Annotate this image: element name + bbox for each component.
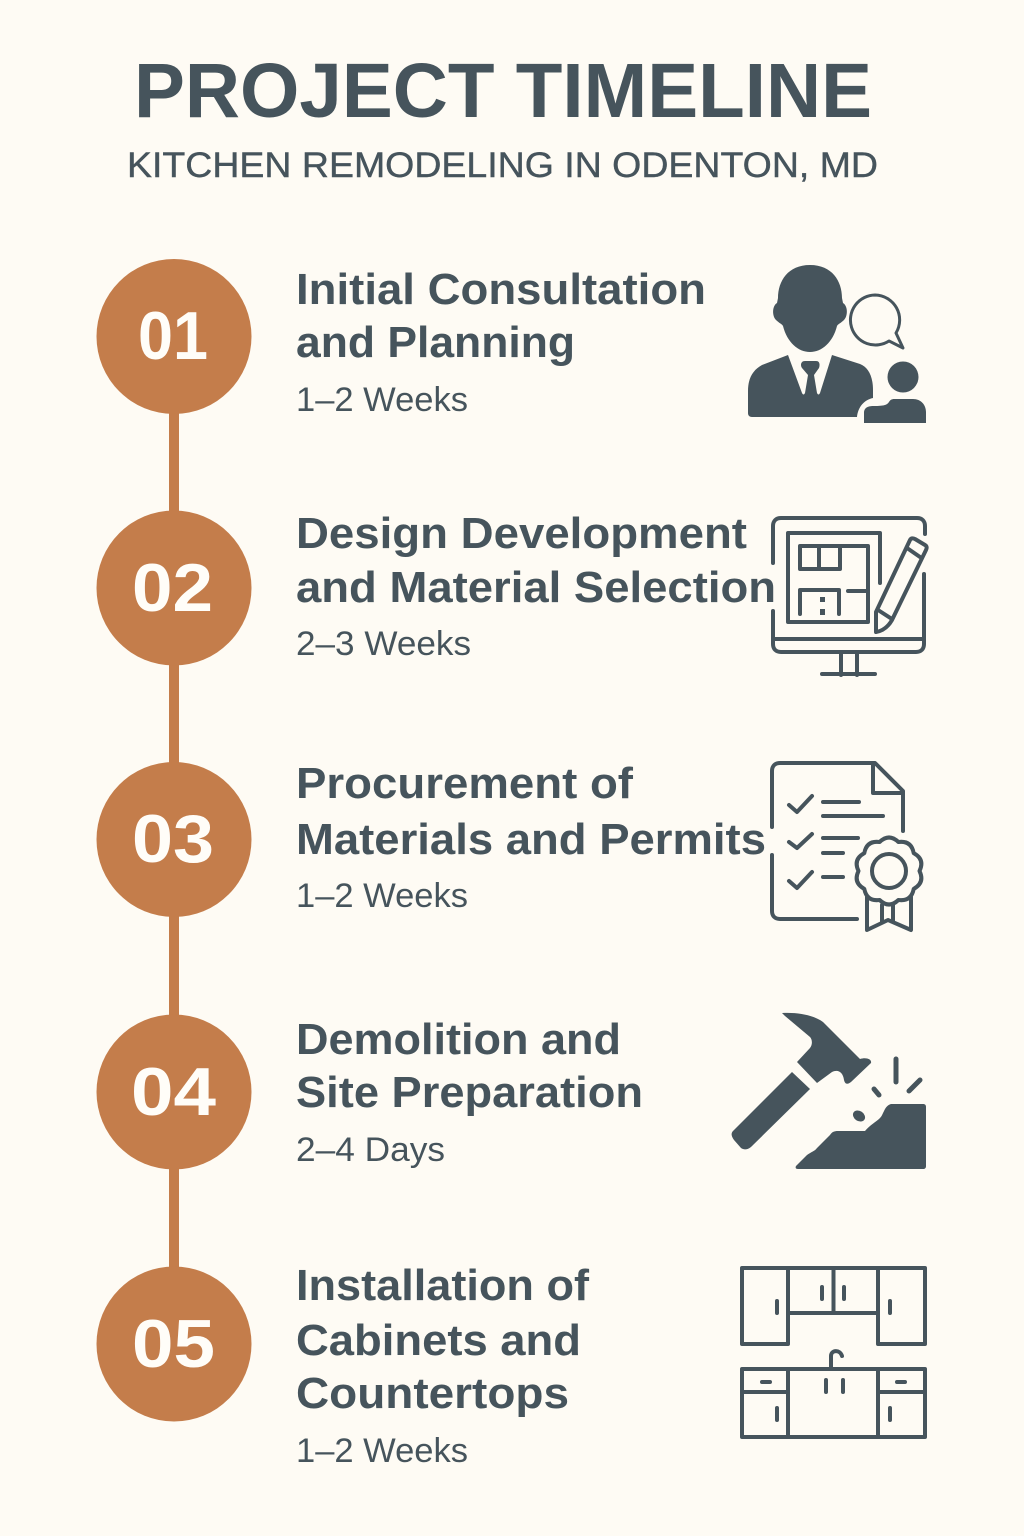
step 4 [96, 1013, 926, 1170]
icon: checklist with certificate seal [772, 763, 921, 930]
step 5 number badge: 05 [132, 1306, 215, 1382]
step 3 duration: 1–2 Weeks [296, 877, 468, 915]
icon: floor plan on monitor with pencil [773, 518, 927, 675]
step 1 [96, 259, 926, 423]
step 5 heading: Cabinets and [296, 1316, 581, 1365]
step 5 heading: Countertops [296, 1369, 569, 1418]
step 3 heading: Materials and Permits [296, 815, 766, 864]
step 3 [96, 759, 921, 930]
subtitle: KITCHEN REMODELING IN ODENTON, MD [127, 146, 878, 185]
icon: kitchen cabinets and sink [742, 1268, 925, 1437]
step 3 number badge: 03 [132, 801, 214, 877]
timeline connector line [169, 336, 179, 1344]
step 4 number badge: 04 [131, 1054, 216, 1130]
step 5 [96, 1261, 925, 1470]
step 1 number badge [96, 259, 252, 414]
step 2 [96, 509, 927, 675]
step 3 number badge [96, 762, 252, 917]
step 2 heading: Design Development [296, 509, 747, 558]
step 5 heading: Installation of [296, 1261, 589, 1310]
title: PROJECT TIMELINE [134, 48, 872, 134]
step 4 heading: Site Preparation [296, 1068, 643, 1117]
step 5 duration: 1–2 Weeks [296, 1432, 468, 1470]
step 1 heading: and Planning [296, 318, 575, 367]
icon: hammer striking rubble [732, 1013, 926, 1169]
step 2 heading: and Material Selection [296, 563, 776, 612]
icon: consultant with speech bubble [748, 265, 926, 423]
step 5 number badge [96, 1266, 252, 1422]
step 2 number badge: 02 [132, 550, 213, 626]
step 4 duration: 2–4 Days [296, 1131, 445, 1169]
step 3 heading: Procurement of [296, 759, 633, 808]
step 2 number badge [96, 510, 252, 666]
step 2 duration: 2–3 Weeks [296, 625, 471, 663]
step 4 heading: Demolition and [296, 1015, 621, 1064]
step 1 number badge: 01 [138, 298, 208, 374]
step 4 number badge [96, 1014, 252, 1170]
step 1 heading: Initial Consultation [296, 265, 706, 314]
step 1 duration: 1–2 Weeks [296, 381, 468, 419]
